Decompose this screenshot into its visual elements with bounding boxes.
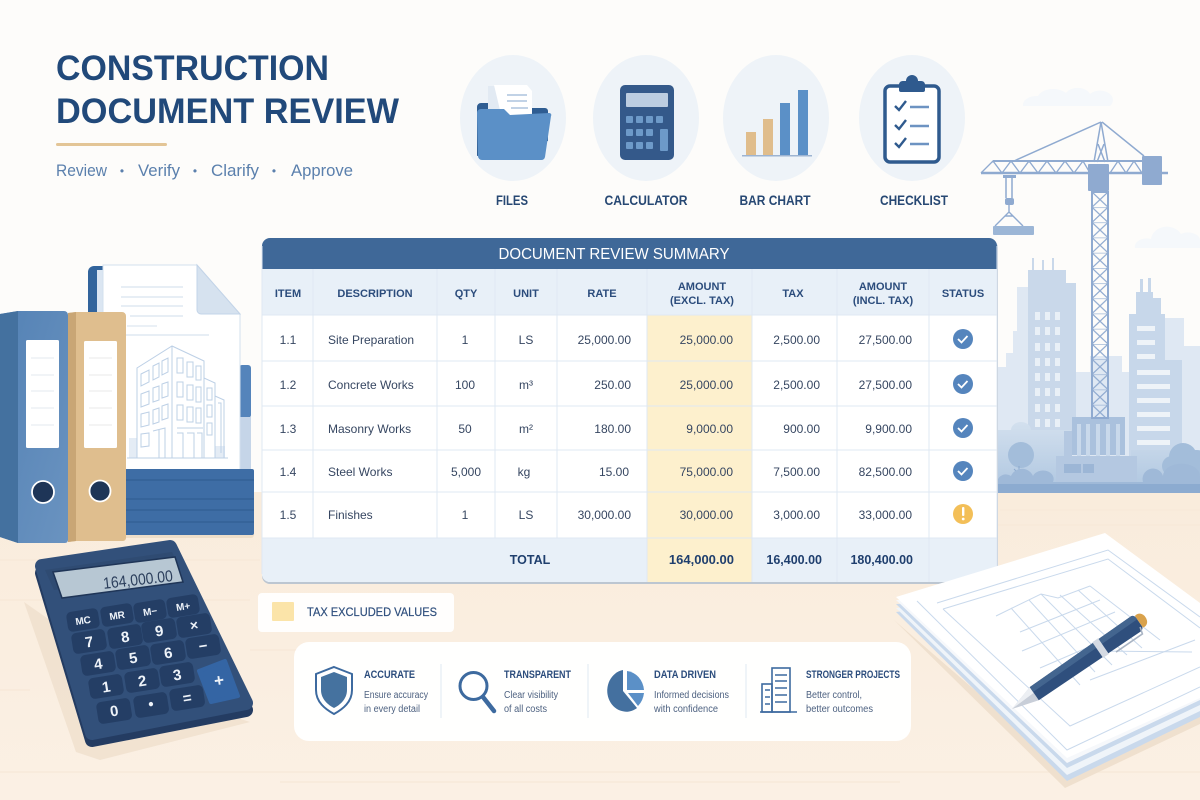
row 1.1 — [280, 333, 912, 347]
row 1.5: 33,000.00 — [859, 508, 912, 522]
row 1.2 — [280, 378, 912, 392]
row 1.5: Finishes — [328, 508, 373, 522]
icon: checklist — [859, 55, 965, 181]
row 1.1: 1.1 — [280, 333, 297, 347]
row 1.3 — [280, 422, 912, 436]
row 1.1: Site Preparation — [328, 333, 414, 347]
column header row: TAX — [782, 288, 804, 300]
benefit: accurate: Ensure accuracy — [364, 690, 428, 701]
icon: bar chart — [723, 55, 829, 181]
row 1.4: 15.00 — [599, 465, 629, 479]
calculator: × — [189, 616, 199, 634]
row 1.4: 1.4 — [280, 465, 297, 479]
row 1.5: 30,000.00 — [680, 508, 733, 522]
row 1.4 — [280, 465, 912, 479]
crane — [981, 122, 1168, 418]
row 1.1: 25,000.00 — [680, 333, 733, 347]
total row background — [262, 538, 997, 582]
row 1.5: LS — [519, 508, 533, 522]
benefit: data driven: DATA DRIVEN — [654, 669, 716, 681]
subtitle — [56, 161, 353, 180]
row 1.3: 9,900.00 — [865, 422, 912, 436]
column header row: RATE — [587, 288, 617, 300]
calculator: M− — [142, 606, 158, 619]
row 1.4: Steel Works — [328, 465, 392, 479]
row 1.2: 100 — [455, 378, 475, 392]
pen — [1007, 609, 1152, 719]
icon: files — [460, 55, 566, 181]
row 1.4: 82,500.00 — [859, 465, 912, 479]
column header row — [262, 269, 997, 315]
calculator: 3 — [172, 666, 183, 685]
calculator: − — [197, 637, 209, 656]
column header row: QTY — [455, 288, 478, 300]
row 1.2: 1.2 — [280, 378, 297, 392]
excl. tax highlight column — [647, 315, 752, 582]
calculator — [24, 547, 250, 760]
row 1.1: 1 — [462, 333, 469, 347]
table title bar — [262, 238, 997, 269]
row 1.5: 30,000.00 — [578, 508, 631, 522]
total row: 180,400.00 — [850, 553, 913, 567]
row 1.5 — [280, 508, 912, 522]
row 1.2: 250.00 — [594, 378, 631, 392]
calculator: 0 — [109, 702, 120, 721]
calculator: 6 — [163, 644, 174, 663]
label: files: FILES — [496, 193, 528, 208]
benefit: data driven: with confidence — [653, 704, 718, 715]
row 1.1: 25,000.00 — [578, 333, 631, 347]
row 1.4: 7,500.00 — [773, 465, 820, 479]
row 1.5: 1 — [462, 508, 469, 522]
column header row: DESCRIPTION — [337, 288, 413, 300]
subtitle: Verify — [138, 161, 180, 180]
total row: TOTAL — [510, 553, 551, 567]
binder: blue — [0, 311, 68, 543]
calculator: = — [182, 689, 193, 708]
calculator: 8 — [120, 628, 131, 647]
benefit: transparent: of all costs — [504, 704, 547, 715]
benefit: accurate: in every detail — [364, 704, 420, 715]
row 1.3: m² — [519, 422, 533, 436]
subtitle: Approve — [291, 161, 353, 180]
benefit: stronger projects: Better control, — [806, 690, 862, 701]
row 1.5: 3,000.00 — [773, 508, 820, 522]
row 1.3: 1.3 — [280, 422, 297, 436]
row 1.3: 50 — [458, 422, 472, 436]
title accent rule — [56, 143, 167, 146]
panel: benefits — [294, 642, 911, 741]
binder: tan — [68, 312, 126, 542]
benefit: stronger projects: better outcomes — [806, 704, 873, 715]
column header row: (INCL. TAX) — [853, 295, 913, 307]
benefit: transparent — [460, 669, 571, 715]
label: bar chart: BAR CHART — [740, 193, 811, 208]
row 1.3: 9,000.00 — [686, 422, 733, 436]
calculator: • — [147, 696, 155, 713]
row 1.1: 27,500.00 — [859, 333, 912, 347]
row 1.4: 5,000 — [451, 465, 481, 479]
subtitle: • — [272, 164, 276, 178]
subtitle: Clarify — [211, 161, 259, 180]
blueprint stack with pen — [894, 533, 1200, 788]
icon: calculator — [593, 55, 699, 181]
benefit: accurate — [316, 667, 428, 715]
row 1.2: 2,500.00 — [773, 378, 820, 392]
panel: document review summary table — [262, 238, 998, 584]
row 1.4: 75,000.00 — [680, 465, 733, 479]
column header row: AMOUNT — [678, 281, 726, 293]
row 1.2: 27,500.00 — [859, 378, 912, 392]
legend: tax excluded values — [258, 593, 454, 632]
table title bar: DOCUMENT REVIEW SUMMARY — [498, 246, 730, 263]
row 1.3: Masonry Works — [328, 422, 411, 436]
title: DOCUMENT REVIEW — [56, 92, 399, 131]
title — [56, 49, 399, 131]
label: calculator: CALCULATOR — [604, 193, 688, 208]
label: checklist: CHECKLIST — [880, 193, 949, 208]
row 1.4: kg — [518, 465, 530, 479]
calculator: 164,000.00 — [102, 568, 174, 593]
row 1.1: LS — [519, 333, 533, 347]
calculator: 4 — [93, 655, 104, 674]
benefit: transparent: Clear visibility — [504, 690, 558, 701]
total row — [510, 552, 913, 567]
row 1.2: 25,000.00 — [680, 378, 733, 392]
column header row: (EXCL. TAX) — [670, 295, 734, 307]
calculator: M+ — [175, 601, 191, 614]
column header row: ITEM — [275, 288, 301, 300]
benefit: transparent: TRANSPARENT — [504, 669, 571, 681]
skyline illustration — [997, 88, 1200, 493]
row 1.1: 2,500.00 — [773, 333, 820, 347]
column header row: UNIT — [513, 288, 539, 300]
binder stack — [120, 469, 254, 538]
desk surface — [0, 492, 1200, 800]
background wall — [0, 0, 1200, 495]
calculator: 2 — [137, 672, 148, 691]
benefit: stronger projects: STRONGER PROJECTS — [806, 669, 900, 681]
legend: tax excluded values: TAX EXCLUDED VALUES — [307, 605, 437, 619]
calculator: MR — [109, 610, 127, 623]
benefit: data driven — [607, 669, 729, 715]
title: CONSTRUCTION — [56, 49, 329, 88]
subtitle: • — [120, 164, 124, 178]
total row: 164,000.00 — [669, 552, 734, 567]
row 1.5: 1.5 — [280, 508, 297, 522]
status icons — [953, 329, 973, 524]
benefit: accurate: ACCURATE — [364, 669, 415, 681]
subtitle: • — [193, 164, 197, 178]
row 1.3: 900.00 — [783, 422, 820, 436]
document with building sketch — [88, 265, 251, 472]
calculator: MC — [75, 615, 92, 628]
row 1.3: 180.00 — [594, 422, 631, 436]
benefit: stronger projects — [760, 668, 900, 715]
subtitle: Review — [56, 161, 108, 180]
column header row: AMOUNT — [859, 281, 907, 293]
row 1.2: m³ — [519, 378, 533, 392]
column header row: STATUS — [942, 288, 984, 300]
calculator: 7 — [84, 633, 95, 652]
benefit: data driven: Informed decisions — [654, 690, 729, 701]
calculator: + — [213, 670, 226, 691]
calculator: 1 — [101, 678, 112, 697]
calculator: 9 — [154, 622, 165, 641]
row 1.2: Concrete Works — [328, 378, 414, 392]
total row: 16,400.00 — [766, 553, 822, 567]
calculator: 5 — [128, 649, 139, 668]
